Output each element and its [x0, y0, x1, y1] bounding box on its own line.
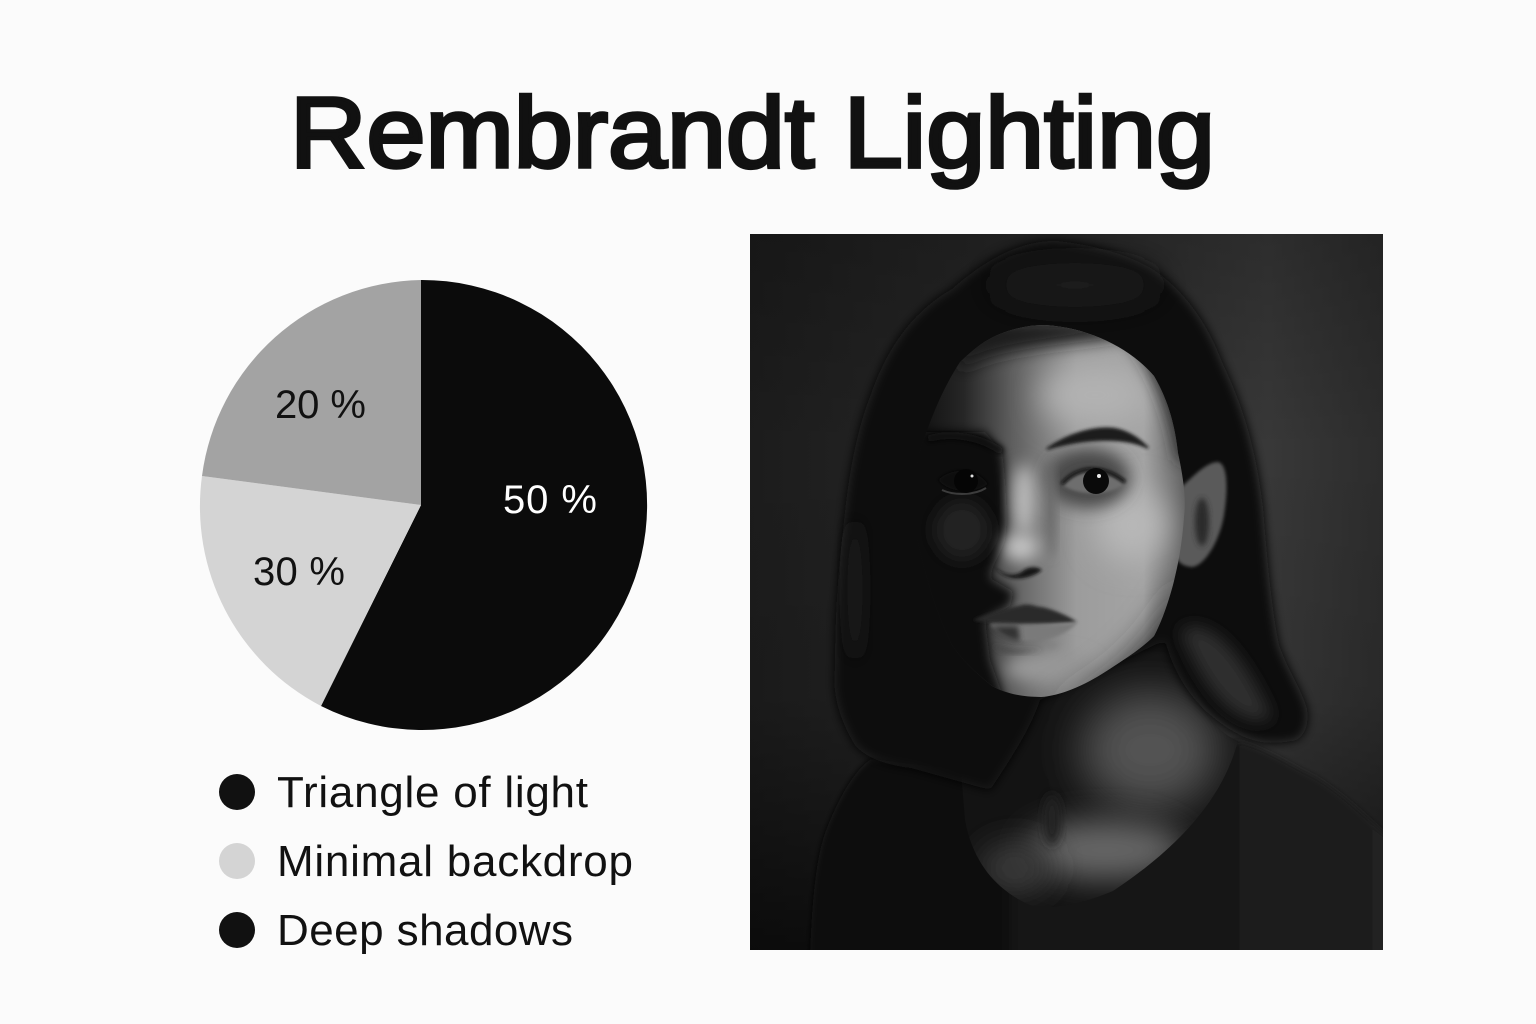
slice: 20% [202, 280, 421, 505]
dim cheek on shadow side [934, 500, 990, 560]
title: Rembrandt Lighting [290, 77, 1215, 189]
label: 20%: 20 % [275, 383, 366, 427]
lips [973, 604, 1077, 641]
pie chart [200, 280, 647, 730]
left eyebrow [928, 436, 1002, 452]
nostril shadow [994, 566, 1042, 578]
ear [1176, 462, 1226, 567]
face base gradient [930, 325, 1184, 697]
hairline shade on top [962, 325, 1120, 371]
hairline shade on right [1120, 348, 1181, 469]
hair crown sheen [1006, 263, 1144, 307]
nose side shading [1044, 462, 1056, 558]
cheek bright [1096, 489, 1168, 561]
right eye [1062, 468, 1125, 494]
neck and chest [970, 641, 1236, 899]
sweater [810, 741, 1390, 960]
chin light [1005, 652, 1095, 684]
legend [219, 768, 633, 955]
nose bridge highlight [1013, 464, 1035, 536]
slice: 50% [321, 280, 647, 730]
portrait photo [750, 234, 1390, 960]
legend item: Triangle of light: Triangle of light [277, 768, 588, 817]
slice: 30% [200, 476, 421, 706]
photo backdrop [750, 234, 1383, 950]
label: 30%: 30 % [253, 550, 345, 594]
face [930, 325, 1184, 697]
nose tip highlight [1003, 532, 1039, 562]
left hair wisp highlight [848, 540, 862, 640]
under-eye socket shadow [1046, 448, 1130, 508]
hard shadow side of the face [926, 427, 1019, 692]
hair [834, 241, 1308, 790]
legend item: Minimal backdrop: Minimal backdrop [277, 837, 633, 886]
left eye [938, 469, 988, 494]
under lip shadow [1002, 648, 1036, 656]
forehead lit [1040, 363, 1150, 427]
hair strands highlight [1180, 626, 1272, 720]
legend item: Deep shadows: Deep shadows [277, 906, 573, 955]
label: 50%: 50 % [503, 478, 597, 522]
right eyebrow [1047, 428, 1148, 449]
jaw falloff [1050, 578, 1174, 696]
